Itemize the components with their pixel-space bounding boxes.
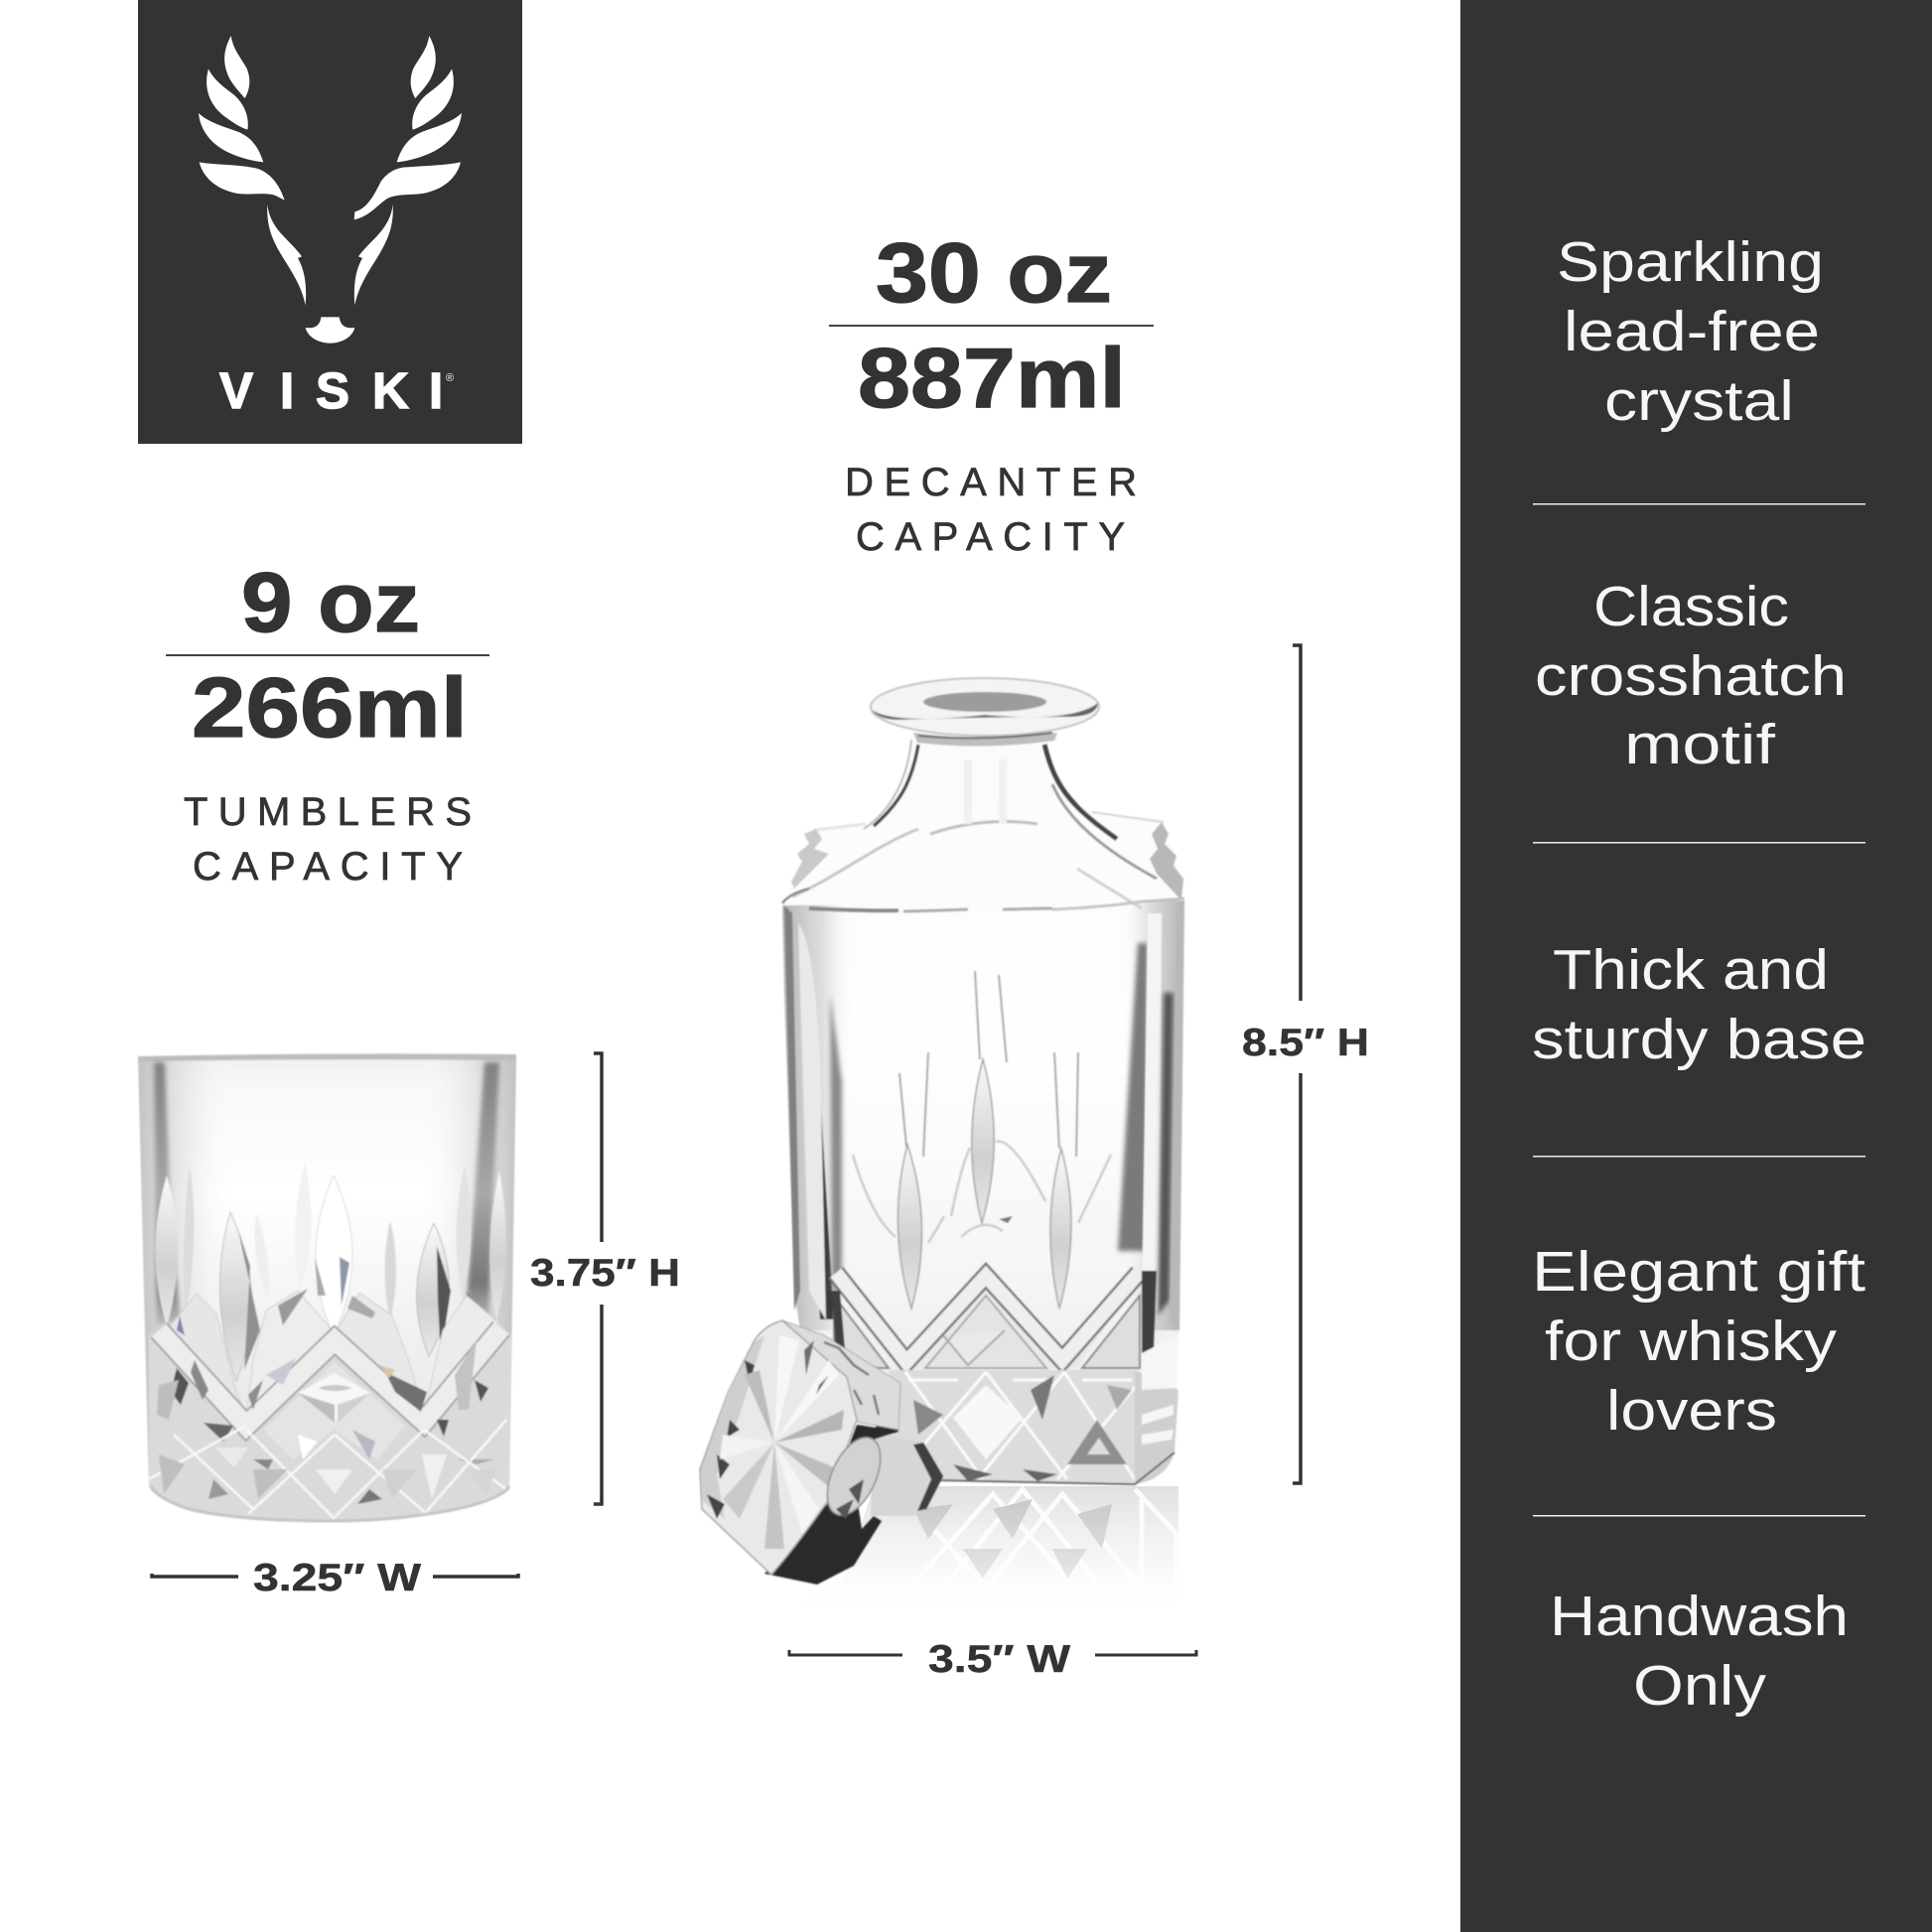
line three: crystal xyxy=(1604,369,1794,433)
rim speckles xyxy=(824,1342,879,1415)
reflected facets xyxy=(898,1489,1176,1588)
side pillars xyxy=(784,903,1184,1330)
top rim band xyxy=(782,1320,900,1430)
lower facet shading xyxy=(159,1448,496,1504)
bubble sparkle xyxy=(836,1479,864,1519)
chevron band edge xyxy=(159,1328,501,1426)
line two: lead-free xyxy=(1564,300,1820,363)
feature: elegant gift for whisky lovers xyxy=(1532,1240,1865,1443)
reflection base xyxy=(784,1486,1178,1614)
base block xyxy=(1135,1370,1178,1484)
label: capacity: CAPACITY xyxy=(193,845,463,889)
base outline xyxy=(894,1452,1174,1484)
label: 8.5″ H xyxy=(1242,1022,1369,1064)
registered mark: ® xyxy=(446,372,454,384)
label: decanter: DECANTER xyxy=(845,461,1137,504)
panel: Viski logo xyxy=(138,0,522,444)
dimension: tumbler height xyxy=(530,1053,680,1504)
lip flange xyxy=(871,678,1099,747)
serrated shoulder corners xyxy=(791,822,1183,900)
neck shading xyxy=(792,740,1164,908)
inner chevron xyxy=(925,1296,1046,1368)
flute cuts xyxy=(853,971,1111,1309)
central diamond panel xyxy=(263,1362,405,1459)
heading: 9 oz: 9 oz xyxy=(241,556,420,650)
line one: Thick and xyxy=(1553,938,1829,1002)
base facets xyxy=(898,1375,1132,1481)
base block highlights xyxy=(1142,1335,1177,1445)
divider xyxy=(1533,1156,1865,1158)
reflection fade xyxy=(774,1484,1181,1615)
line two: crosshatch xyxy=(1535,644,1847,708)
line two: sturdy base xyxy=(1532,1008,1866,1071)
icon: antlered stag head xyxy=(199,36,462,344)
label: 3.5″ W xyxy=(928,1638,1070,1681)
label: 3.25″ W xyxy=(253,1557,421,1599)
illustration: crystal decanter xyxy=(782,678,1184,1484)
stopper head xyxy=(700,1320,857,1575)
label: tumblers: TUMBLERS xyxy=(184,790,472,834)
line three: lovers xyxy=(1606,1379,1777,1443)
bracket xyxy=(789,1650,1196,1655)
feature: handwash only xyxy=(1550,1585,1849,1718)
speckled left edge xyxy=(701,1335,764,1519)
label: capacity: CAPACITY xyxy=(856,515,1125,559)
line one: Sparkling xyxy=(1557,230,1824,294)
dark lower pillars xyxy=(832,1271,1157,1362)
line two: for whisky xyxy=(1545,1310,1838,1373)
rim xyxy=(138,1053,516,1061)
line one: Handwash xyxy=(1550,1585,1849,1648)
reflected dark facets xyxy=(913,1499,1112,1579)
heading: 887ml: 887ml xyxy=(858,332,1126,426)
divider xyxy=(829,325,1154,327)
bracket xyxy=(1293,645,1301,1483)
stem dark end xyxy=(913,1443,943,1511)
dimension: decanter width xyxy=(789,1638,1196,1681)
shoulder line xyxy=(782,889,1184,911)
bracket xyxy=(594,1053,602,1504)
flute cuts xyxy=(155,1162,506,1381)
heading: 30 oz: 30 oz xyxy=(876,226,1112,321)
starburst cut xyxy=(720,1335,844,1549)
divider xyxy=(1533,1515,1865,1517)
dimension: decanter height xyxy=(1242,645,1369,1483)
side triangles xyxy=(834,1296,1140,1368)
tumbler edge shading xyxy=(138,1056,516,1521)
crown peaks xyxy=(169,1291,498,1418)
body edge shading xyxy=(782,900,1184,1330)
body xyxy=(782,733,1184,1484)
line two: Only xyxy=(1633,1654,1767,1718)
text block: decanter capacity xyxy=(829,226,1154,559)
heading: 266ml: 266ml xyxy=(192,661,468,756)
line one: Elegant gift xyxy=(1532,1240,1865,1304)
lower interior panel xyxy=(839,1281,1137,1368)
cross-hatched base xyxy=(889,1370,1135,1482)
edge specks xyxy=(707,1360,755,1519)
feature: classic crosshatch motif xyxy=(1535,575,1847,776)
illustration: fallen stopper xyxy=(700,1320,943,1585)
dark back xyxy=(764,1390,898,1585)
label: 3.75″ H xyxy=(530,1252,680,1295)
illustration: crystal tumbler xyxy=(138,1053,516,1521)
line three: motif xyxy=(1624,713,1775,776)
bracket xyxy=(152,1574,518,1577)
logo background xyxy=(138,0,522,444)
chevron band edge xyxy=(836,1273,1139,1362)
wall reflections xyxy=(154,1062,499,1325)
text block: tumblers capacity xyxy=(166,556,489,889)
feature: sparkling lead-free crystal xyxy=(1557,230,1824,433)
line one: Classic xyxy=(1593,575,1789,638)
tumbler body xyxy=(138,1056,516,1521)
illustration: reflection under decanter xyxy=(774,1484,1181,1615)
peak highlights xyxy=(177,1289,375,1335)
hatch lines xyxy=(898,1372,1137,1479)
chevron band xyxy=(159,1328,501,1426)
stopper stem xyxy=(871,1430,943,1516)
lower cross-hatch lines xyxy=(149,1420,506,1519)
base outline xyxy=(151,1486,509,1521)
prismatic and dark facets xyxy=(157,1340,494,1469)
central diamond xyxy=(298,1373,370,1423)
chevron band xyxy=(836,1273,1139,1362)
divider xyxy=(166,654,489,656)
feature: thick and sturdy base xyxy=(1532,938,1866,1071)
divider xyxy=(1533,503,1865,504)
diamond-cut band xyxy=(149,1322,511,1521)
stem bubble xyxy=(816,1430,892,1523)
dimension: tumbler width xyxy=(152,1557,518,1599)
logo wordmark: VISKI xyxy=(219,362,443,419)
panel: features sidebar background xyxy=(1460,0,1932,1932)
divider xyxy=(1533,842,1865,844)
